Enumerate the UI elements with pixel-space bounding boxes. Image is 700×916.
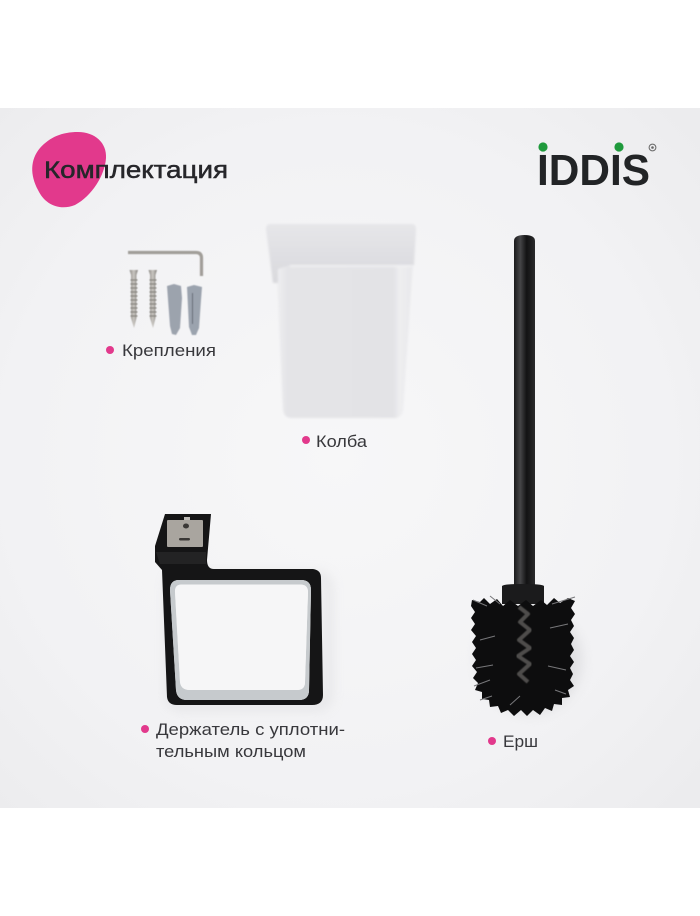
brush handle <box>514 235 535 586</box>
label: Колба: Колба <box>316 433 368 451</box>
item: wall holder with sealing ring <box>155 514 328 706</box>
label: Держатель с уплотнительным кольцом <box>141 721 345 761</box>
cup body <box>276 262 413 418</box>
sealing ring <box>170 580 311 700</box>
label: Ерш <box>488 733 538 751</box>
cup rim <box>266 224 416 283</box>
hex key <box>128 252 202 276</box>
screw 1 <box>130 270 138 328</box>
label: Ерш: Ерш <box>503 733 538 751</box>
label: Крепления: Крепления <box>122 342 216 360</box>
item: toilet brush <box>471 235 582 716</box>
ring opening <box>175 584 308 690</box>
logo: IDDIS: IDDIS <box>537 146 650 195</box>
holder frame <box>155 514 323 705</box>
bristle texture <box>473 596 575 705</box>
item: frosted glass cup <box>266 224 416 418</box>
mounting plate <box>156 517 206 564</box>
heading: Комплектация <box>32 132 228 207</box>
background panel <box>0 108 700 808</box>
brush bristles <box>471 598 575 716</box>
brush collar <box>502 584 544 604</box>
wall plug 2 <box>187 285 202 335</box>
pink blob <box>32 132 106 207</box>
wall plug 1 <box>167 284 182 335</box>
item: mounting hardware <box>128 252 202 335</box>
screw 2 <box>148 270 157 328</box>
label: Держатель с уплотнительным кольцом: тельным кольцом <box>156 743 306 761</box>
label: Держатель с уплотнительным кольцом: Держатель с уплотни- <box>156 721 345 739</box>
heading text: Комплектация <box>44 157 228 184</box>
